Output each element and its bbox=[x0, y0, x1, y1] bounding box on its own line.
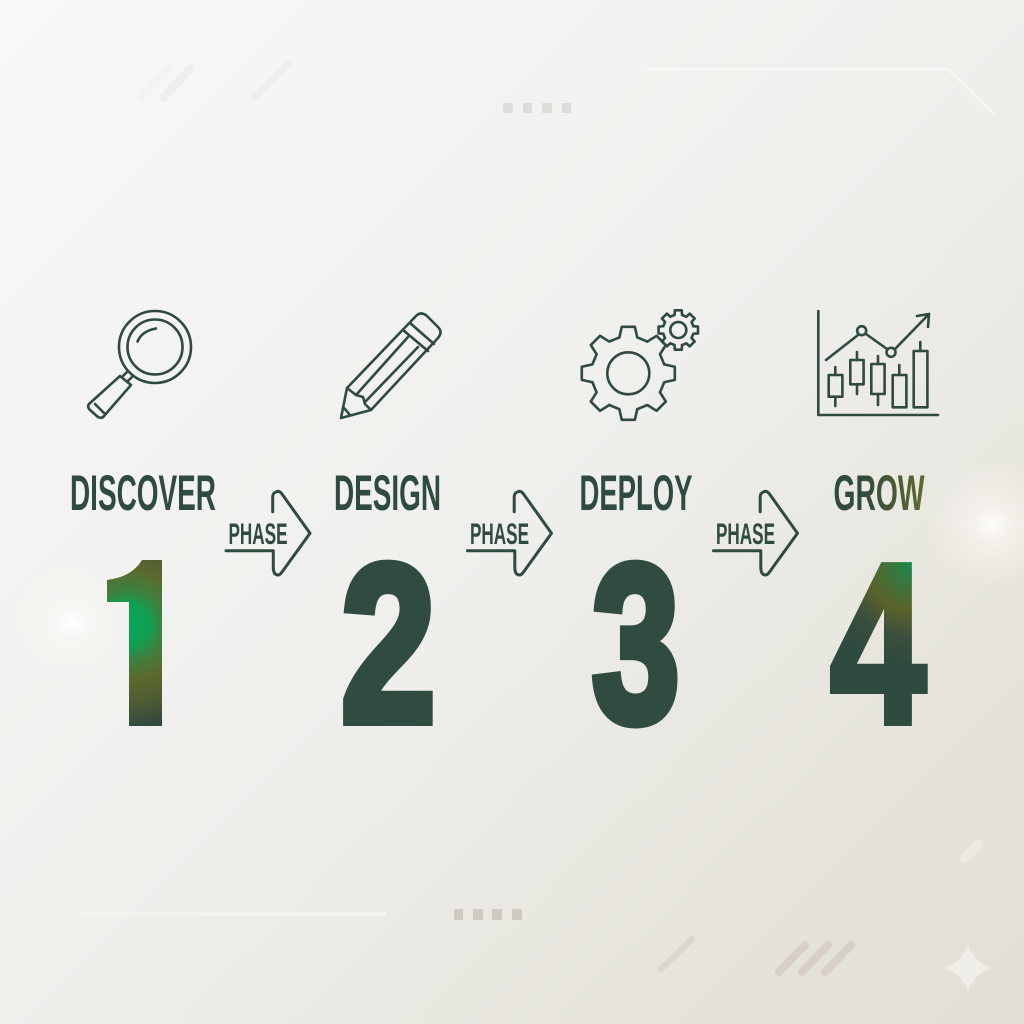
arrow: phase 3 to 4 bbox=[714, 491, 798, 575]
bottom decorations bbox=[4, 844, 979, 972]
label: DEPLOY: DEPLOY bbox=[580, 465, 692, 521]
icon: sparkle star bbox=[944, 944, 992, 992]
arrow: phase 3 to 4: PHASE bbox=[716, 518, 775, 551]
icon: gears bbox=[582, 310, 698, 420]
number 4: 4 bbox=[830, 518, 926, 772]
label: DISCOVER: DISCOVER bbox=[70, 465, 216, 521]
arrow: phase 2 to 3 bbox=[468, 491, 552, 575]
top decorations bbox=[142, 64, 993, 113]
icon: magnifying glass bbox=[88, 311, 191, 418]
arrow: phase 1 to 2: PHASE bbox=[228, 518, 288, 551]
glow: right lens flare bbox=[928, 461, 1024, 589]
number 1: 1 bbox=[97, 518, 191, 772]
arrow: phase 1 to 2 bbox=[226, 491, 310, 575]
label: GROW: GROW bbox=[834, 465, 925, 521]
number 2: 2 bbox=[341, 519, 436, 769]
icon: candlestick chart bbox=[818, 311, 938, 415]
icon: pencil bbox=[341, 314, 440, 418]
number 3: 3 bbox=[592, 519, 680, 769]
arrow: phase 2 to 3: PHASE bbox=[470, 518, 529, 551]
label: DESIGN: DESIGN bbox=[334, 465, 441, 521]
glow: left lens flare bbox=[10, 561, 134, 685]
